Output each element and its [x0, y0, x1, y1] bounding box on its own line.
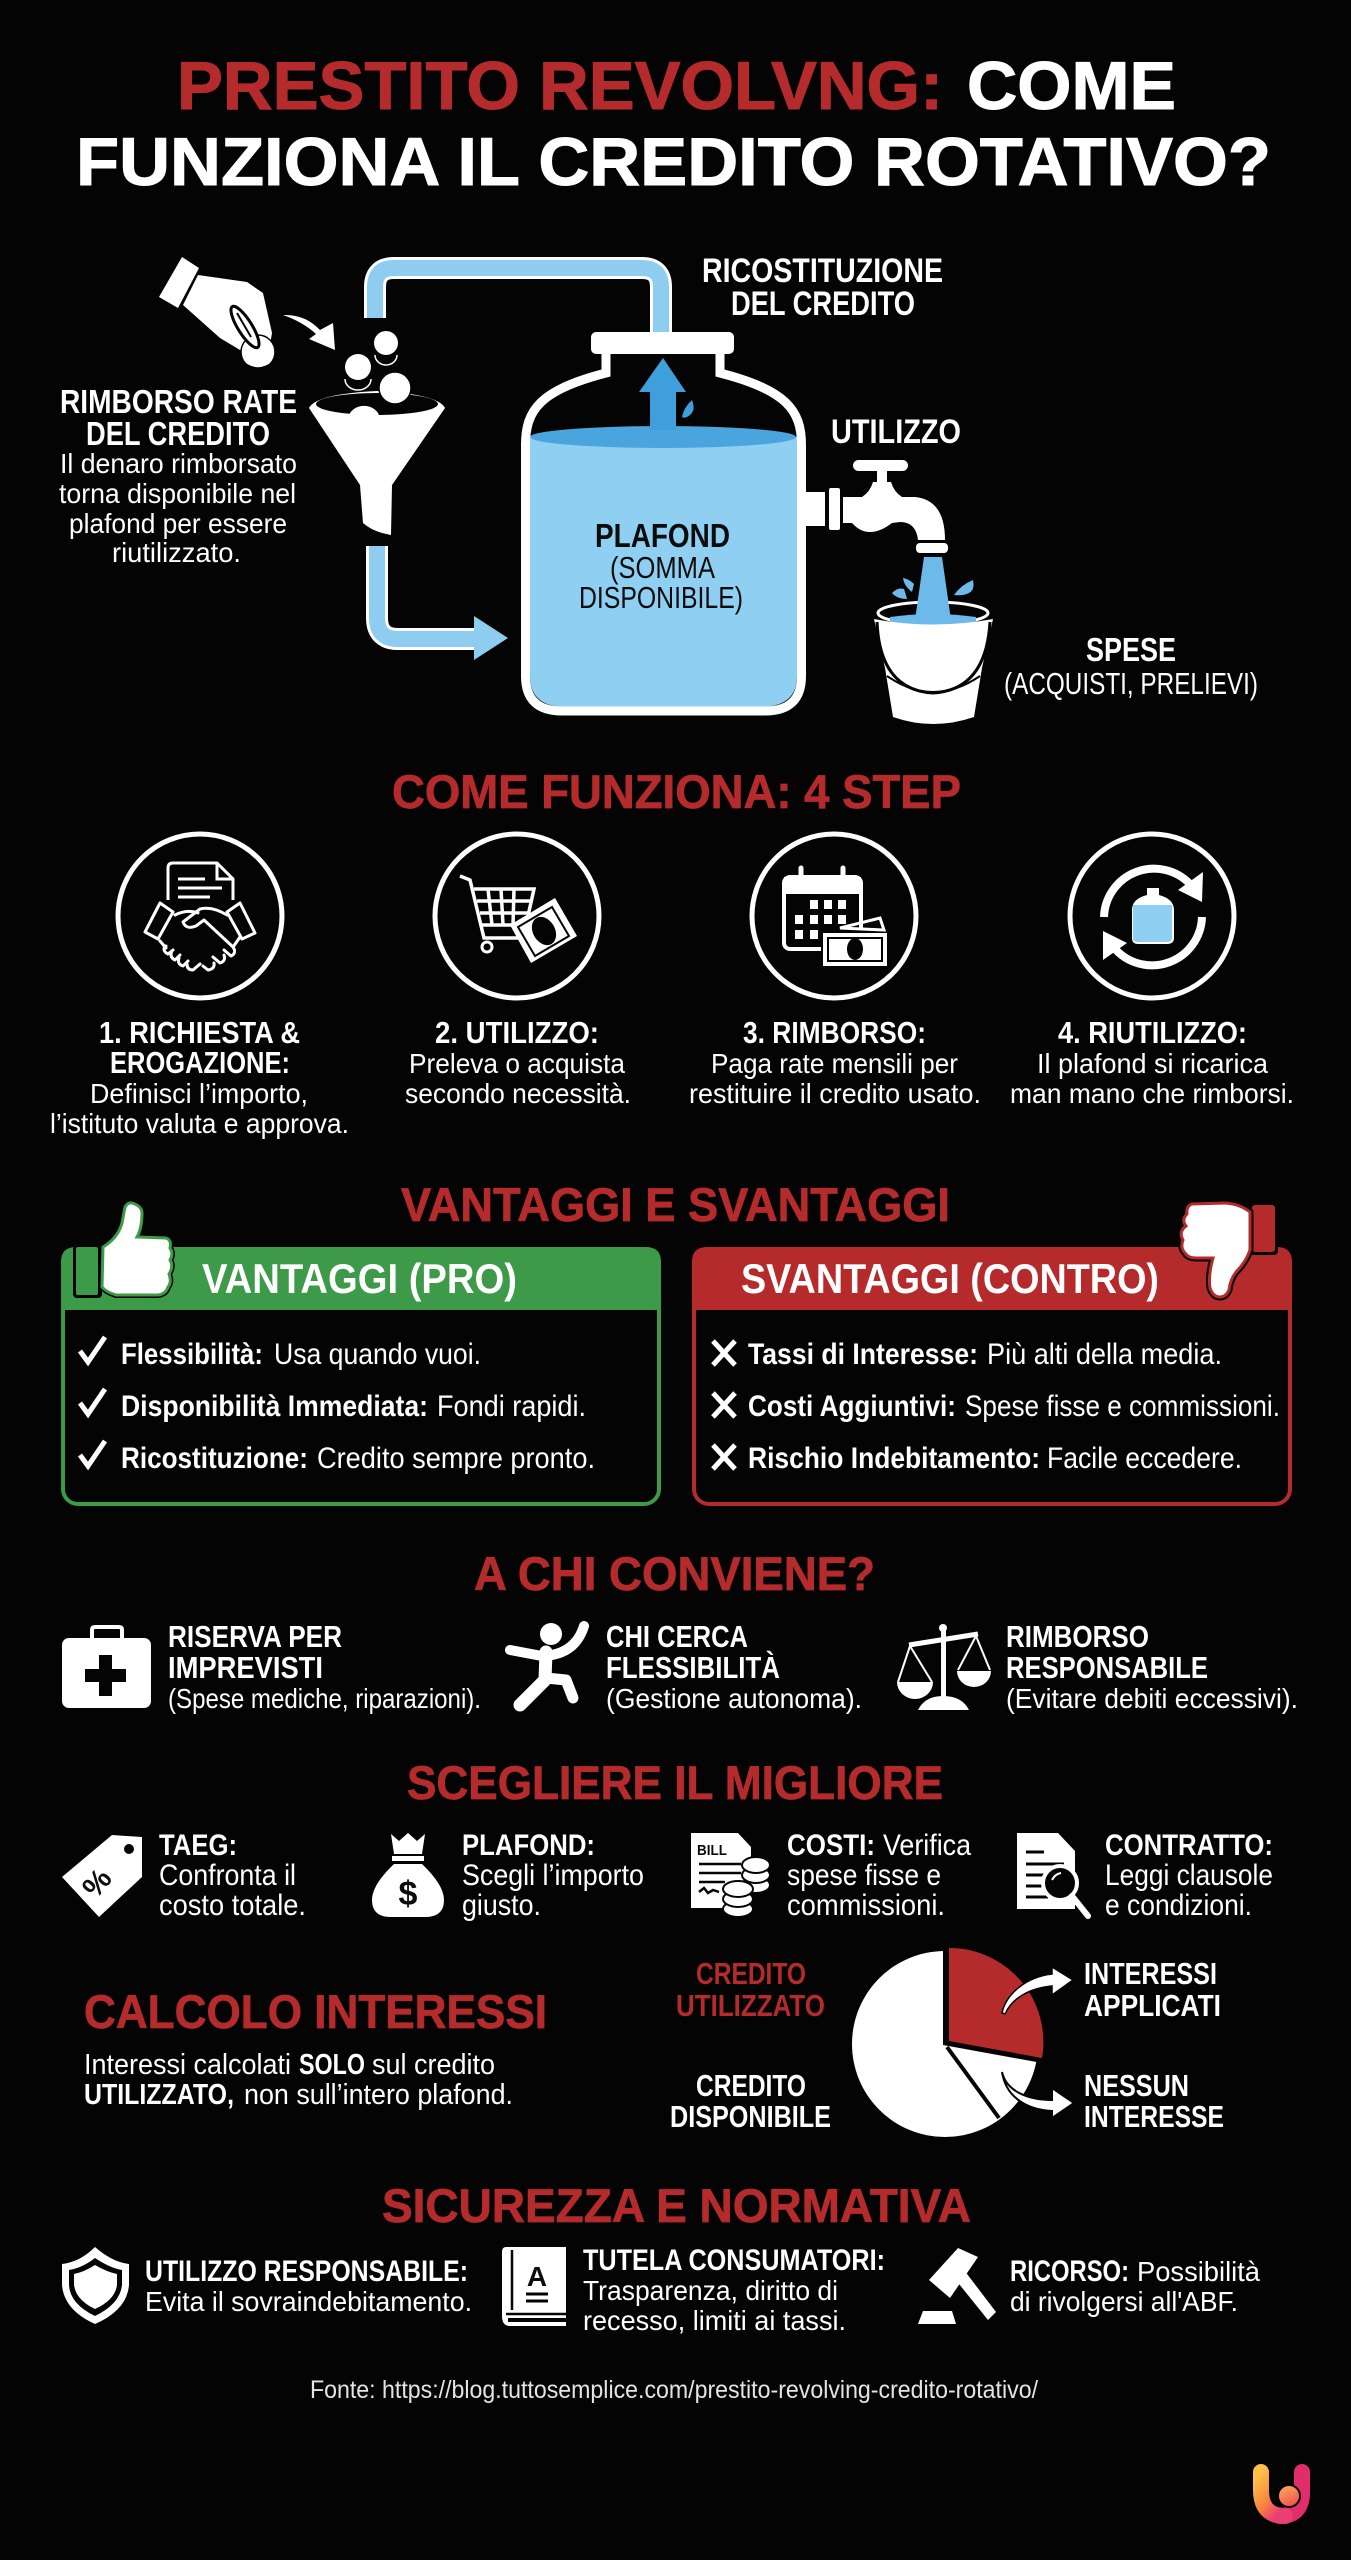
text: contratto: e condizioni.: [1105, 1889, 1252, 1922]
label: ricostituzione: [702, 252, 943, 323]
label: ricostituzione: RICOSTITUZIONE: [702, 252, 943, 290]
label: spese: SPESE: [1086, 631, 1176, 668]
text: riserva: (Spese mediche, riparazioni).: [168, 1683, 481, 1714]
icon: funnel: [309, 372, 445, 535]
text: step 3: [689, 1015, 981, 1109]
text: rimborso responsabile: RESPONSABILE: [1006, 1650, 1208, 1685]
arrow: up: [639, 358, 686, 430]
icon: coins: [345, 331, 398, 390]
icon: money bag: $: [399, 1875, 418, 1913]
text: tutela consumatori: [583, 2244, 885, 2336]
text: rimborso rate: Il denaro rimborsato: [60, 448, 297, 479]
step 4: [1010, 834, 1294, 1109]
icon: recycle tank: [1070, 834, 1234, 998]
criterion: plafond: [372, 1829, 644, 1922]
label: spese: [1004, 631, 1258, 701]
arrow: coin falling: [283, 315, 335, 350]
logo: [1261, 2472, 1302, 2516]
list: vantaggi: Credito sempre pronto.: [317, 1442, 595, 1475]
text: step 1: l’istituto valuta e approva.: [50, 1108, 349, 1139]
text: rimborso rate: torna disponibile nel: [59, 478, 296, 509]
icon: first aid kit: [62, 1627, 151, 1708]
label: plafond: DISPONIBILE): [579, 580, 743, 615]
text: flessibilita: CHI CERCA: [606, 1619, 748, 1654]
list: svantaggi: [713, 1338, 1280, 1475]
arrow: pipe into tank: [377, 546, 508, 660]
text: step 4: Il plafond si ricarica: [1037, 1048, 1268, 1079]
arrow: nessun interesse: [1002, 2072, 1074, 2118]
text: riserva: RISERVA PER: [168, 1619, 342, 1654]
pie labels: INTERESSI: [1084, 1956, 1217, 1991]
pie chart: [852, 1945, 1074, 2137]
text: calcolo interessi: SOLO: [299, 2049, 365, 2081]
pie labels: CREDITO: [696, 1956, 806, 1991]
text: rimborso rate: [59, 383, 297, 568]
icon: scales: [897, 1624, 991, 1710]
icon: bucket with water: [874, 557, 993, 724]
text: ricorso: di rivolgersi all'ABF.: [1010, 2286, 1238, 2317]
text: tutela consumatori: TUTELA CONSUMATORI:: [583, 2244, 885, 2277]
list: vantaggi: Flessibilità:: [121, 1338, 263, 1371]
list: svantaggi: Più alti della media.: [987, 1338, 1222, 1371]
step 1: [50, 834, 349, 1139]
text: rimborso rate: riutilizzato.: [112, 537, 241, 568]
safety: tutela consumatori: [502, 2244, 885, 2336]
text: rimborso responsabile: (Evitare debiti eccessivi).: [1006, 1683, 1298, 1714]
text: contratto: Leggi clausole: [1105, 1859, 1273, 1892]
text: contratto: [1105, 1829, 1273, 1922]
heading: a chi conviene: A CHI CONVIENE?: [474, 1547, 875, 1600]
tank: [526, 332, 802, 711]
text: calcolo interessi: non sull’intero plafond.: [244, 2079, 513, 2111]
pipe: top return: [375, 268, 661, 334]
audience: flessibilita: [510, 1619, 862, 1714]
pie labels: NESSUN: [1084, 2068, 1189, 2103]
text: step 2: [405, 1015, 631, 1109]
text: taeg: costo totale.: [159, 1889, 306, 1922]
label: plafond: [579, 517, 743, 615]
text: riserva: [168, 1619, 481, 1714]
icon: calendar and money: [752, 834, 916, 998]
label: utilizzo: UTILIZZO: [831, 413, 961, 451]
text: plafond: PLAFOND:: [462, 1829, 595, 1862]
pie labels: DISPONIBILE: [670, 2099, 831, 2134]
text: tutela consumatori: recesso, limiti ai tassi.: [583, 2305, 846, 2336]
heading: vantaggi e svantaggi: VANTAGGI E SVANTAGGI: [401, 1178, 950, 1231]
text: rimborso responsabile: [1006, 1619, 1298, 1714]
panel: svantaggi: [692, 1202, 1292, 1504]
icon: law book: A: [527, 2261, 547, 2292]
criterion: costi: [691, 1829, 971, 1922]
droplet: [682, 400, 694, 418]
list: vantaggi: Ricostituzione:: [121, 1442, 308, 1475]
text: utilizzo responsabile: [145, 2255, 472, 2317]
list: svantaggi: Tassi di Interesse:: [748, 1338, 978, 1371]
icon: bill and coins: BILL: [697, 1842, 727, 1859]
icon: thumb down: [1181, 1202, 1278, 1297]
list: vantaggi: Usa quando vuoi.: [274, 1338, 481, 1371]
heading: come funziona: COME FUNZIONA: 4 STEP: [392, 765, 961, 818]
text: riserva: IMPREVISTI: [168, 1650, 323, 1685]
slice: credito utilizzato: [949, 1948, 1043, 2058]
source: Fonte: https://blog.tuttosemplice.com/prestito-revolving-credito-rotativo/: [310, 2376, 1038, 2404]
text: calcolo interessi: [84, 2049, 513, 2111]
text: utilizzo responsabile: UTILIZZO RESPONSABILE:: [145, 2255, 468, 2288]
step 2: [405, 834, 631, 1109]
text: costi: [787, 1829, 971, 1922]
pie labels: CREDITO: [696, 2068, 806, 2103]
text: plafond: giusto.: [462, 1889, 541, 1922]
label: plafond: (SOMMA: [610, 550, 715, 585]
text: taeg: Confronta il: [159, 1859, 296, 1892]
heading: sicurezza e normativa: SICUREZZA E NORMATIVA: [382, 2179, 971, 2232]
text: contratto: CONTRATTO:: [1105, 1829, 1273, 1862]
text: step 1: Definisci l’importo,: [90, 1078, 308, 1109]
pie labels: INTERESSE: [1084, 2099, 1224, 2134]
text: step 2: Preleva o acquista: [409, 1048, 625, 1079]
label: plafond: PLAFOND: [595, 517, 730, 554]
title: FUNZIONA IL CREDITO ROTATIVO?: [76, 124, 1271, 200]
list: vantaggi: Disponibilità Immediata:: [121, 1390, 428, 1423]
icon: contract and handshake: [118, 834, 282, 998]
icon: shield: [62, 2247, 129, 2324]
arrow: interessi applicati: [1002, 1967, 1073, 2014]
safety: ricorso: [918, 2248, 1260, 2324]
icon: faucet: [804, 460, 948, 553]
icon: percent tag: [62, 1835, 142, 1917]
list: vantaggi: Fondi rapidi.: [437, 1390, 586, 1423]
icon: cart and money: [435, 834, 599, 998]
icon: money bag: [372, 1833, 444, 1917]
title: [76, 48, 1271, 200]
list: svantaggi: Facile eccedere.: [1047, 1442, 1242, 1475]
icon: thumb up: [73, 1203, 172, 1298]
text: taeg: TAEG:: [159, 1829, 237, 1862]
heading: calcolo interessi: CALCOLO INTERESSI: [84, 1985, 547, 2038]
text: ricorso: [1010, 2255, 1260, 2317]
revolving credit diagram: [59, 252, 1258, 724]
text: rimborso responsabile: RIMBORSO: [1006, 1619, 1149, 1654]
text: costi: Verifica: [883, 1829, 971, 1862]
text: rimborso rate: plafond per essere: [69, 508, 287, 539]
text: step 2: secondo necessità.: [405, 1078, 631, 1109]
criterion: contratto: [1017, 1829, 1273, 1922]
audience: riserva: [62, 1619, 481, 1714]
text: step 1: [50, 1015, 349, 1139]
step 3: [689, 834, 981, 1109]
title: COME: [967, 48, 1176, 124]
icon: bill and coins: [691, 1833, 770, 1917]
text: costi: COSTI:: [787, 1829, 875, 1862]
text: rimborso rate: RIMBORSO RATE: [60, 383, 297, 420]
list: svantaggi: Costi Aggiuntivi:: [748, 1390, 956, 1423]
icon: law book: [502, 2247, 566, 2326]
list: vantaggi: [80, 1337, 595, 1475]
text: plafond: [462, 1829, 644, 1922]
text: calcolo interessi: sul credito: [372, 2049, 495, 2081]
text: step 3: Paga rate mensili per: [711, 1048, 958, 1079]
divider line: [947, 2047, 999, 2118]
panel: vantaggi: [61, 1203, 661, 1504]
text: flessibilita: FLESSIBILITÀ: [606, 1650, 780, 1685]
text: rimborso rate: DEL CREDITO: [86, 415, 270, 452]
text: svantaggi header: SVANTAGGI (CONTRO): [741, 1255, 1159, 1302]
safety: utilizzo responsabile: [62, 2247, 472, 2324]
criterion: taeg: [62, 1829, 306, 1922]
icon: running figure: [510, 1623, 584, 1705]
text: taeg: [159, 1829, 306, 1922]
title: PRESTITO REVOLVNG:: [177, 48, 943, 124]
text: flessibilita: [606, 1619, 862, 1714]
label: ricostituzione: DEL CREDITO: [731, 285, 915, 323]
heading: scegliere il migliore: SCEGLIERE IL MIGLIORE: [407, 1756, 943, 1809]
text: step 4: man mano che rimborsi.: [1010, 1078, 1294, 1109]
text: step 3: 3. RIMBORSO:: [743, 1015, 926, 1050]
list: svantaggi: Spese fisse e commissioni.: [965, 1390, 1280, 1423]
label: spese: (ACQUISTI, PRELIEVI): [1004, 666, 1258, 701]
text: costi: spese fisse e: [787, 1859, 941, 1892]
icon: percent tag: %: [76, 1862, 119, 1904]
text: calcolo interessi: Interessi calcolati: [84, 2049, 291, 2081]
text: step 1: EROGAZIONE:: [110, 1045, 290, 1080]
text: step 3: restituire il credito usato.: [689, 1078, 981, 1109]
text: step 4: 4. RIUTILIZZO:: [1058, 1015, 1247, 1050]
audience: rimborso responsabile: [897, 1619, 1298, 1714]
icon: gavel: [918, 2248, 996, 2324]
text: ricorso: Possibilità: [1137, 2256, 1260, 2287]
text: step 1: 1. RICHIESTA &: [99, 1015, 300, 1050]
pie labels: [670, 1956, 1224, 2134]
text: step 2: 2. UTILIZZO:: [435, 1015, 599, 1050]
text: vantaggi header: VANTAGGI (PRO): [202, 1255, 517, 1302]
text: utilizzo responsabile: Evita il sovraindebitamento.: [145, 2286, 472, 2317]
icon: document with magnifier: [1017, 1833, 1088, 1916]
text: calcolo interessi: UTILIZZATO,: [84, 2079, 234, 2111]
text: plafond: Scegli l’importo: [462, 1859, 644, 1892]
text: flessibilita: (Gestione autonoma).: [606, 1683, 862, 1714]
pie labels: UTILIZZATO: [676, 1988, 825, 2023]
text: tutela consumatori: Trasparenza, diritto di: [583, 2275, 838, 2306]
text: costi: commissioni.: [787, 1889, 945, 1922]
icon: hand dropping coin: [159, 257, 275, 369]
list: svantaggi: Rischio Indebitamento:: [748, 1442, 1040, 1475]
text: ricorso: RICORSO:: [1010, 2255, 1129, 2288]
text: step 4: [1010, 1015, 1294, 1109]
pie labels: APPLICATI: [1084, 1988, 1221, 2023]
